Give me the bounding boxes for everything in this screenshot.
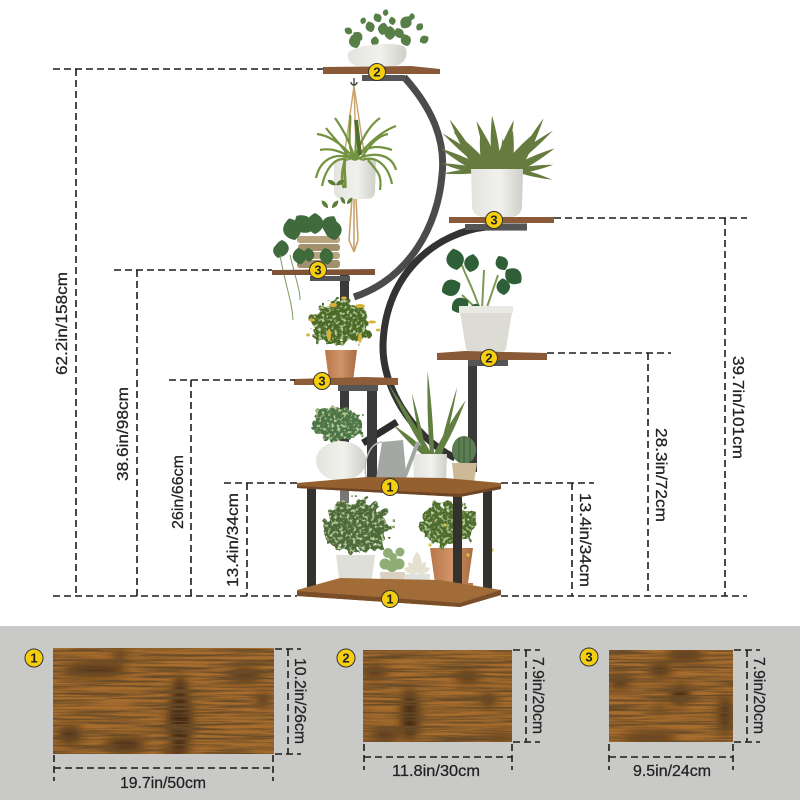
badge 1: 1 [30,650,38,666]
white pot [334,160,376,199]
white pot [459,306,513,352]
badge 3 right upper [486,212,502,228]
white pot [471,169,523,217]
dimension: 38.6in [114,270,272,596]
round leaves [439,247,526,317]
dimension: 39.7in [501,218,747,596]
curved arm: large arc [354,77,443,297]
badge 2 right: 2 [485,350,493,366]
stems [462,265,498,310]
board 3 [580,648,767,780]
wooden shelves [272,66,554,607]
board 2 [337,649,546,780]
white pot [336,555,375,589]
blades [439,115,556,182]
badge 1 lower: 1 [386,592,394,606]
dimension: depth 10.2in [275,649,308,754]
wood texture 1 [53,648,274,756]
middle shelf [294,377,398,385]
round pot [316,441,366,481]
hook and cords [335,78,374,252]
badge 3 left [310,262,326,278]
dimension: 13.4in left: 13.4in/34cm [225,493,242,587]
right shelf [437,351,547,360]
terracotta pot [325,350,357,381]
foliage [310,300,372,344]
trailing stems [280,255,300,320]
badge 3 left: 3 [314,262,322,278]
dimension: width 11.8in [364,744,512,780]
dimension: 39.7in: 39.7in/101cm [729,356,746,459]
badge 1 upper [382,478,398,496]
brace [363,422,397,443]
round white pot plant [312,407,366,481]
dimension: 13.4in right [501,483,594,596]
succulent in small pot [380,548,405,594]
right plant on shelf 2 [439,247,526,352]
dimension: 28.3in: 28.3in/72cm [652,428,669,522]
watering can [365,440,418,485]
badge 3 middle: 3 [318,374,326,388]
lower legs [307,487,492,600]
dimension: width 11.8in: 11.8in/30cm [392,763,480,780]
board 1 [25,648,308,792]
badge 2 right [480,350,498,366]
panel: shelf board sizes [0,626,800,800]
dimension: depth 7.9in [734,650,767,742]
dimension: overall height 62.2in: 62.2in/158cm [54,272,71,375]
snake plant [386,371,469,487]
striped pot [297,236,340,268]
dimension: 26in: 26in/66cm [170,455,187,529]
lower bushy plant [324,500,390,589]
badge 3 right upper: 3 [490,212,498,228]
trailing leaves [320,178,354,209]
shelf number badges [310,64,502,608]
badge 2 [337,649,355,667]
left shelf [272,269,375,275]
curved arm: lower arc [383,227,527,458]
top shelf [323,66,440,74]
badge 1 lower [382,590,398,608]
top plant with white bowl [343,9,430,66]
dimension: depth 7.9in: 7.9in/20cm [529,657,546,734]
dimension: overall height 62.2in [53,69,323,596]
right upper plant with white pot [439,115,556,217]
foliage [272,210,343,266]
yellow flowering plant [306,296,380,381]
dimension: depth 7.9in: 7.9in/20cm [750,657,767,734]
left plant on shelf 3 [272,210,343,320]
dimension: depth 10.2in: 10.2in/26cm [291,658,308,744]
badge 1 [25,649,43,667]
badge 1 upper: 1 [386,480,394,494]
terracotta pot with leafy plant [420,503,494,597]
foliage [343,9,430,50]
yellow flowers [306,296,380,343]
dimension: width 19.7in [54,755,273,792]
dimension: width 9.5in: 9.5in/24cm [633,763,711,780]
badge 2: 2 [342,650,350,666]
badge 3 middle [314,372,330,390]
badge 3: 3 [585,650,593,664]
wood texture 2 [361,650,516,742]
wood texture 3 [609,650,733,742]
white pot [413,454,447,487]
hanging plant in macrame [316,78,396,252]
upper wide shelf [297,477,501,497]
dimension: width 9.5in [609,744,733,780]
dimension: 38.6in: 38.6in/98cm [115,387,132,481]
badge 3 [580,648,598,666]
badge 2 top: 2 [373,64,381,80]
cactus in stone pot [452,436,477,486]
dimension: 26in [169,380,295,596]
badge 2 top [368,64,386,80]
dimension: width 19.7in: 19.7in/50cm [120,775,206,792]
dimension: 13.4in left [224,483,297,596]
small white pot with pale flower [403,552,431,597]
upper posts [310,75,527,503]
spider plant blades [316,115,396,190]
dimension: 28.3in [547,353,671,596]
plant stand frame [310,75,527,503]
right upper shelf [449,217,554,223]
dimension: 13.4in right: 13.4in/34cm [576,493,593,587]
bottom wide shelf [297,578,501,607]
dimension: depth 7.9in [513,650,546,742]
white bowl [348,44,407,66]
